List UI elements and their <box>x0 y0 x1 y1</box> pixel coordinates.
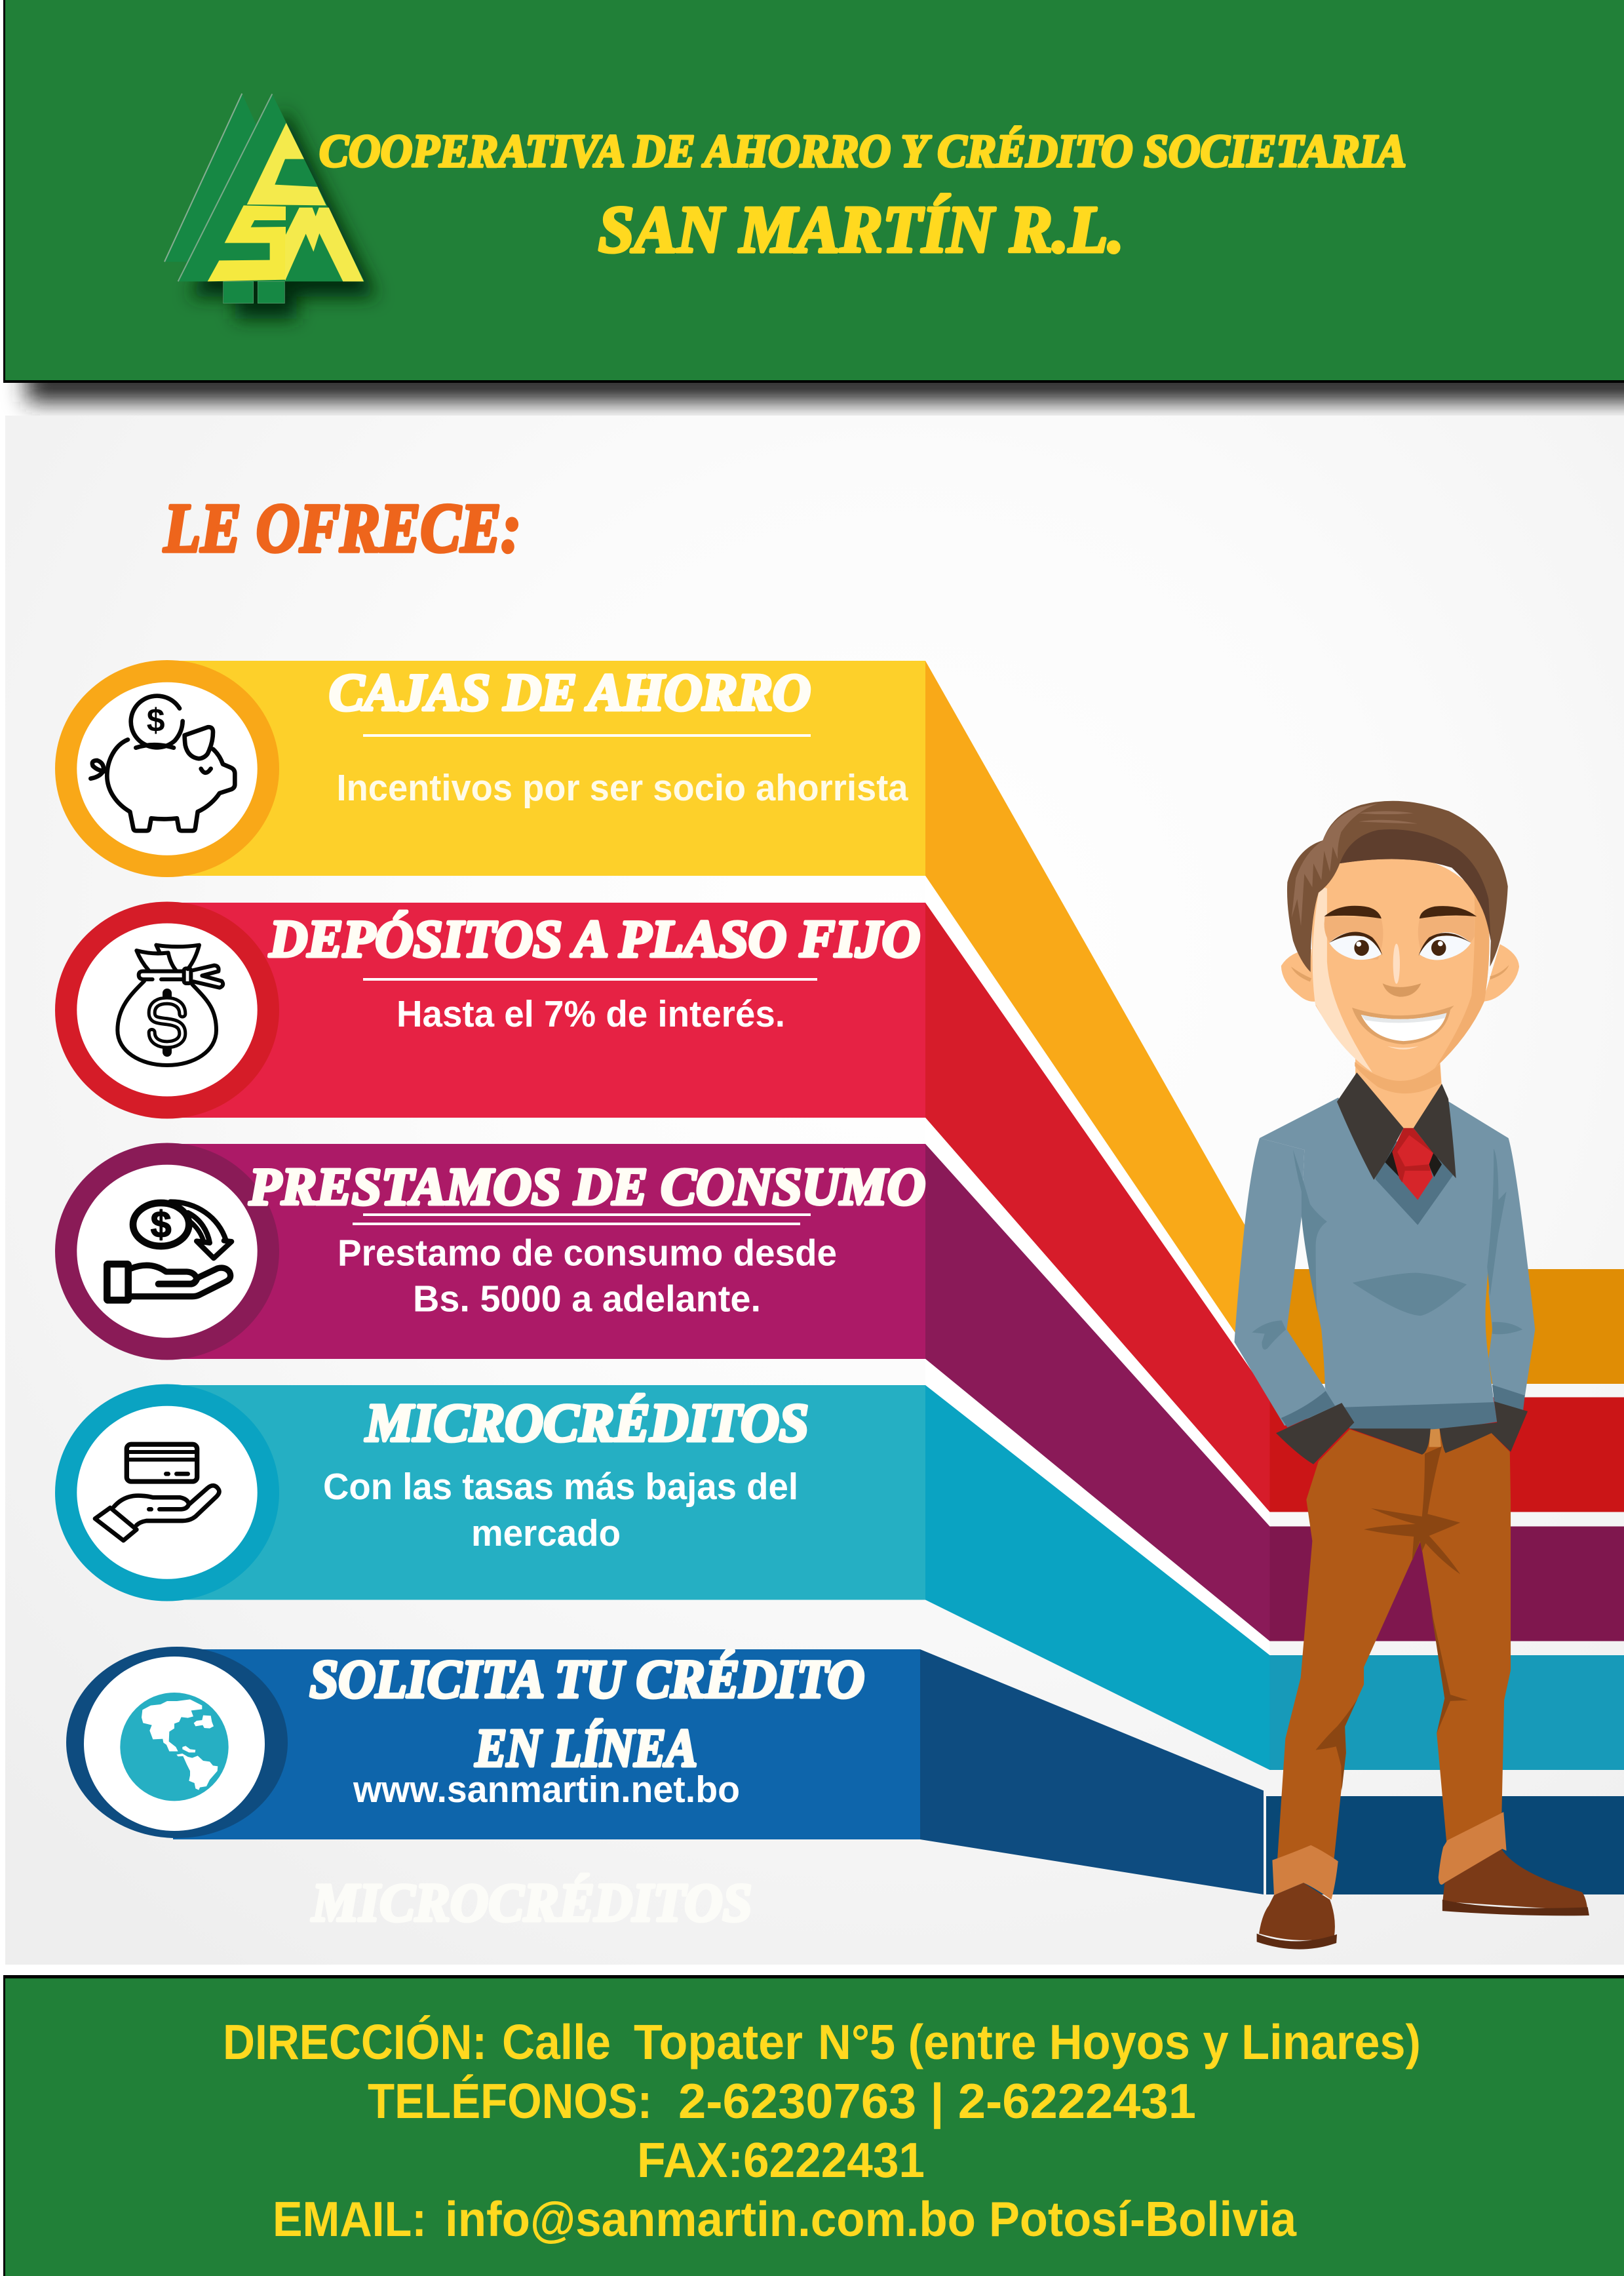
title line 1: COOPERATIVA DE AHORRO Y CRÉDITO SOCIETARIA <box>319 126 1406 177</box>
phones: TELÉFONOS: <box>368 2073 652 2129</box>
heading: EN LÍNEA <box>474 1717 697 1778</box>
title line 2: SAN MARTÍN R.L. <box>598 193 1124 267</box>
phones <box>368 2073 1196 2129</box>
description <box>338 1232 837 1320</box>
panel: microcreditos <box>55 1384 925 1601</box>
description: mercado <box>471 1512 621 1554</box>
address: DIRECCIÓN: <box>223 2014 487 2070</box>
description: Incentivos por ser socio ahorrista <box>337 767 909 809</box>
heading: CAJAS DE AHORRO <box>329 663 811 722</box>
heading: MICROCRÉDITOS <box>364 1392 809 1453</box>
email: EMAIL: <box>273 2191 427 2247</box>
icon: piggy bank: $ <box>147 702 165 739</box>
main panel background <box>5 416 1624 1965</box>
faint ghost heading: MICROCRÉDITOS <box>311 1872 752 1933</box>
ribbon: depositos <box>925 903 1624 1512</box>
email: info@sanmartin.com.bo <box>445 2191 976 2247</box>
logo: CSM pine trees <box>164 94 376 319</box>
description: Bs. 5000 a adelante. <box>413 1278 761 1320</box>
address: N°5 (entre Hoyos y Linares) <box>818 2014 1421 2070</box>
icon: money bag <box>117 945 223 1065</box>
email <box>273 2191 1297 2247</box>
icon: coin over hand: $ <box>151 1204 171 1246</box>
ribbon: cajas de ahorro <box>925 661 1624 1384</box>
description <box>323 1466 798 1554</box>
header banner <box>3 0 1624 383</box>
icon: piggy bank <box>90 696 235 831</box>
panel: depositos a plaso fijo <box>55 902 925 1118</box>
ribbon: microcreditos <box>925 1385 1624 1770</box>
header shadow <box>8 383 1624 416</box>
3D ribbons leading behind the character <box>920 661 1624 1894</box>
description: Con las tasas más bajas del <box>323 1466 798 1508</box>
legs and shoes <box>1257 1428 1589 1950</box>
heading <box>309 1649 864 1778</box>
description: Prestamo de consumo desde <box>338 1232 837 1274</box>
fax: FAX:6222431 <box>637 2132 925 2188</box>
email: Potosí-Bolivia <box>989 2191 1297 2247</box>
website: www.sanmartin.net.bo <box>353 1769 740 1811</box>
icon: coin over hand <box>107 1202 231 1300</box>
sweater hem and pockets <box>1276 1385 1528 1464</box>
icon: globe <box>120 1693 229 1801</box>
address: Calle <box>502 2014 611 2070</box>
panel: prestamos de consumo <box>55 1143 925 1360</box>
ribbon: prestamos <box>925 1144 1624 1641</box>
heading: PRESTAMOS DE CONSUMO <box>248 1157 925 1216</box>
footer banner <box>3 1975 1624 2276</box>
ribbon: solicita tu credito <box>920 1649 1624 1894</box>
heading: DEPÓSITOS A PLASO FIJO <box>269 909 920 968</box>
head and torso <box>1234 801 1535 1426</box>
phones: 2-6230763 | 2-6222431 <box>678 2073 1196 2129</box>
address <box>223 2014 1421 2070</box>
description: Hasta el 7% de interés. <box>396 993 785 1035</box>
heading: le ofrece: LE OFRECE: <box>163 490 521 566</box>
panel: cajas de ahorro <box>55 660 925 877</box>
character: smiling man <box>1234 801 1589 1950</box>
heading: SOLICITA TU CRÉDITO <box>309 1649 864 1709</box>
address: Topater <box>634 2014 803 2070</box>
panel: solicita tu credito en linea <box>66 1647 920 1839</box>
icon: card over hand <box>95 1444 219 1540</box>
